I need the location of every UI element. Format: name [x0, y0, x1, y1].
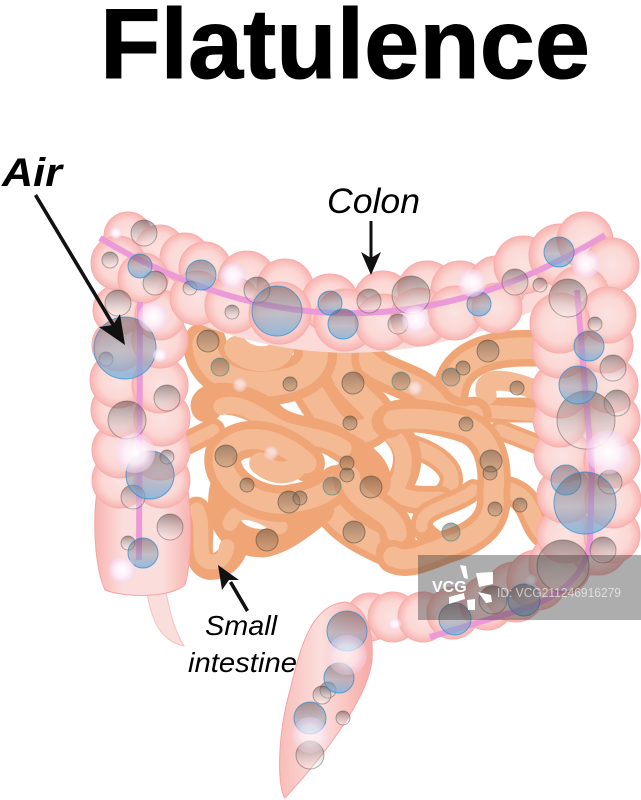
label: Small intestine: intestine [188, 647, 297, 678]
colon: sigmoid section [346, 515, 628, 642]
small intestine [187, 343, 543, 567]
colon: rectum [280, 602, 372, 798]
orange intestine bubbles [197, 330, 527, 551]
label: Colon: Colon [327, 182, 420, 221]
arrow: Colon [361, 221, 381, 275]
arrow: Small intestine [218, 565, 249, 612]
colon: transverse section [91, 212, 639, 353]
label: Small intestine [188, 610, 297, 678]
colon: pink centre lines [100, 235, 605, 637]
air bubbles: grey [99, 220, 630, 769]
colon: cecum [95, 490, 191, 595]
air bubbles: blue [94, 237, 616, 734]
colon: base fill [125, 250, 588, 540]
air bubbles: white glows [109, 227, 630, 753]
arrow: Air [34, 194, 125, 345]
label: Small intestine: Small [205, 610, 278, 641]
watermark: ID: VCG211246916279 [497, 585, 621, 600]
orange intestine highlights [233, 378, 422, 460]
colon: left ascending section [90, 285, 190, 508]
appendix [145, 584, 184, 646]
watermark [418, 555, 641, 620]
colon: right descending section [532, 317, 641, 563]
label: Air: Air [1, 151, 65, 195]
watermark: VCG [432, 579, 467, 596]
